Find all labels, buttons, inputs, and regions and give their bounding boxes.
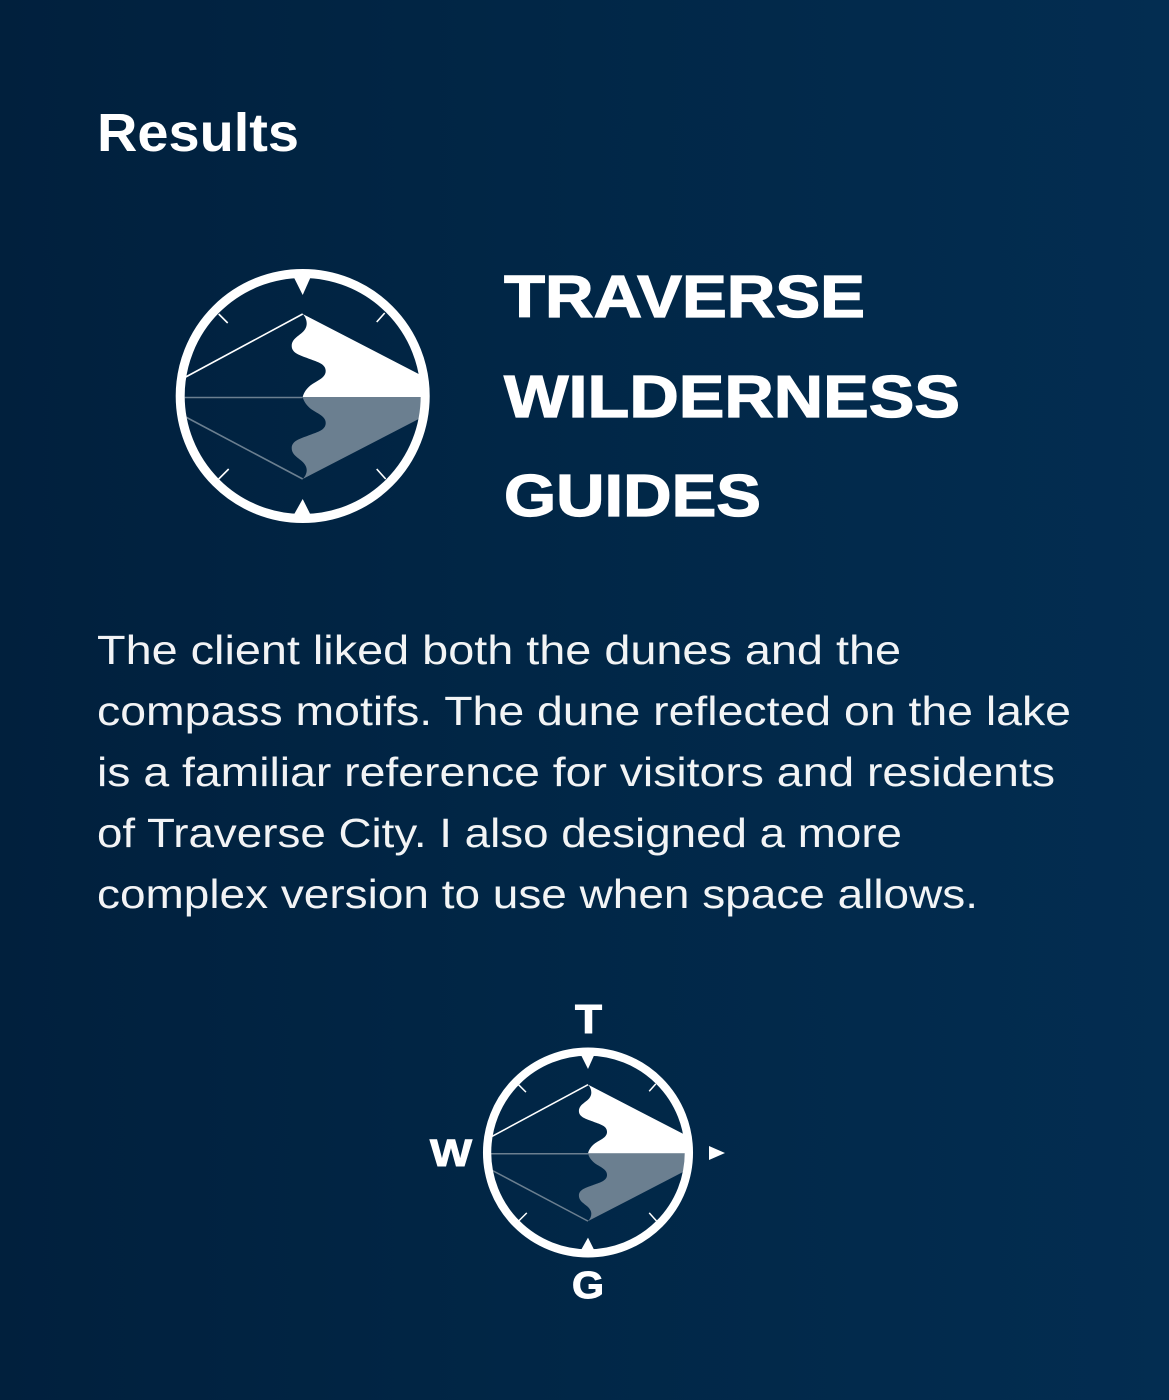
logo wordmark xyxy=(504,264,960,529)
compass letter W: W xyxy=(430,1133,472,1175)
small north marker xyxy=(581,1054,595,1069)
small ticks xyxy=(519,1084,657,1221)
paragraph line 4: of Traverse City. I also designed a more xyxy=(97,810,902,856)
small dune outline xyxy=(491,1085,588,1137)
small waterline xyxy=(490,1153,588,1155)
dune: white sunlit face xyxy=(292,314,423,397)
compass letter T: T xyxy=(575,996,602,1042)
compass ring xyxy=(180,274,425,518)
paragraph line 2: compass motifs. The dune reflected on the lake xyxy=(97,688,1071,734)
dune reflection on lake xyxy=(292,397,423,479)
small compass ring xyxy=(487,1052,689,1253)
paragraph line 3: is a familiar reference for visitors and residents xyxy=(97,749,1055,795)
small white dune xyxy=(579,1085,687,1153)
compass with dune, scaled xyxy=(487,1052,689,1253)
paragraph line 1: The client liked both the dunes and the xyxy=(97,627,901,673)
small reflection outline xyxy=(491,1170,588,1221)
small south marker xyxy=(581,1238,595,1251)
wordmark line 2: WILDERNESS xyxy=(504,364,960,430)
paragraph line 5: complex version to use when space allows. xyxy=(97,871,978,917)
body paragraph xyxy=(97,627,1071,917)
wordmark line 1: TRAVERSE xyxy=(504,264,865,330)
small dune reflection xyxy=(579,1153,687,1221)
east arrow marker xyxy=(709,1146,725,1160)
logo: complex compass variant xyxy=(430,996,725,1307)
compass ticks xyxy=(219,313,386,479)
compass south marker xyxy=(294,499,311,515)
logo: primary compass with dune xyxy=(180,274,425,518)
heading: Results: Results xyxy=(97,103,299,163)
wordmark line 3: GUIDES xyxy=(504,463,761,529)
compass north marker xyxy=(294,277,311,295)
waterline xyxy=(185,396,303,398)
reflection outline xyxy=(186,417,303,479)
compass letter G: G xyxy=(572,1265,604,1307)
dune outline xyxy=(186,314,303,377)
